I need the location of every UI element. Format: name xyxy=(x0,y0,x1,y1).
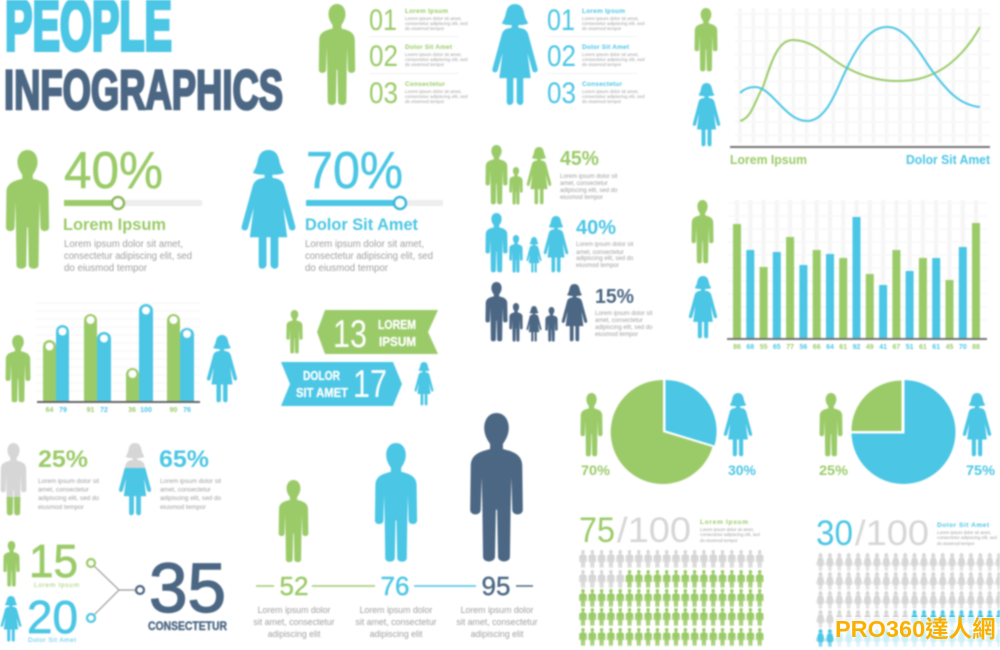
timeline: 95 xyxy=(482,571,510,601)
panel: sum diagram: CONSECTETUR xyxy=(148,619,227,633)
icon: woman xyxy=(1,596,21,642)
captions: Lorem ipsum dolor xyxy=(258,605,330,615)
icon: man filled xyxy=(1,443,26,515)
panel: 40 percent man: consectetur adipiscing elit, sed xyxy=(64,251,192,262)
numbered items: Consectetur xyxy=(582,81,622,88)
numbered items: do eiusmod tempor xyxy=(405,26,445,31)
timeline xyxy=(256,571,533,601)
bar values: 88 xyxy=(972,344,980,351)
bar values: 45 xyxy=(946,344,953,351)
numbered items: do eiusmod tempor xyxy=(405,62,445,67)
panel: pie 25/75 xyxy=(819,380,995,484)
panel: 75 of 100 xyxy=(579,511,764,646)
numbered items: Lorem Ipsum xyxy=(582,8,625,15)
numbered items: do eiusmod tempor xyxy=(582,62,622,67)
panel: pie 70/30: 30% xyxy=(728,463,756,478)
icon: woman xyxy=(207,335,237,402)
panel: pie 25/75: 75% xyxy=(966,463,995,478)
icon: woman xyxy=(689,276,717,338)
panel: family 40 percent: Lorem ipsum dolor sit xyxy=(576,242,634,248)
icon: navy man xyxy=(470,413,523,561)
panel: vertical bar chart xyxy=(689,200,987,351)
panel: numbered list man xyxy=(319,4,468,110)
green ribbon: IPSUM xyxy=(379,335,416,349)
panel: family 45 percent xyxy=(485,145,618,205)
bar values: 61 xyxy=(919,344,927,351)
bar values: 92 xyxy=(853,344,860,351)
panel: sum diagram: 15 xyxy=(29,535,78,587)
panel: sum diagram: Dolor Sit Amet xyxy=(28,637,76,644)
icon: woman xyxy=(724,393,752,456)
bar values: 41 xyxy=(879,344,887,351)
numbered items xyxy=(369,4,468,110)
icon: woman filled xyxy=(119,443,151,515)
bars xyxy=(733,217,980,339)
captions: sit amet, consectetur xyxy=(253,617,335,627)
panel: 25 percent: eiusmod tempor xyxy=(38,504,85,511)
numbered items xyxy=(547,4,645,110)
blue ribbon: SIT AMET xyxy=(296,386,348,400)
panel: family 45 percent: 45% xyxy=(560,148,599,170)
green ribbon xyxy=(317,310,438,356)
blue ribbon xyxy=(281,362,402,406)
panel: family 15 percent: Lorem ipsum dolor sit xyxy=(595,311,653,317)
icon: woman xyxy=(242,150,295,269)
numbered items: Dolor Sit Amet xyxy=(405,44,453,51)
panel: 30 of 100 xyxy=(816,514,1000,647)
numbered items: Lorem ipsum dolor sit amet, xyxy=(405,52,462,57)
green ribbon: LOREM xyxy=(378,318,416,332)
bar values: 72 xyxy=(100,407,108,414)
bar values xyxy=(46,407,191,414)
panel: 75 of 100: /100 xyxy=(617,511,691,550)
panel: family 40 percent: 40% xyxy=(576,217,616,239)
bar values: 65 xyxy=(773,344,781,351)
panel: 70 percent woman: 70% xyxy=(306,142,403,200)
numbered items: consectetur adipiscing elit, sed xyxy=(405,21,468,26)
icon: man xyxy=(286,310,303,354)
bar values: 100 xyxy=(140,407,152,414)
panel: family 15 percent xyxy=(485,282,653,342)
panel: family 45 percent: eiusmod tempor xyxy=(560,195,603,201)
panel: 75 of 100: Lorem Ipsum xyxy=(700,519,748,526)
pictogram grid xyxy=(579,550,764,646)
legend labels xyxy=(730,153,991,167)
panel: family 40 percent xyxy=(485,213,634,273)
numbered items: 03 xyxy=(547,77,576,110)
panel: family 15 percent: adipiscing elit, sed do xyxy=(595,325,653,331)
panel: family 40 percent: adipiscing elit, sed do xyxy=(576,256,634,262)
numbered items: Dolor Sit Amet xyxy=(582,44,630,51)
panel: 40 percent man: do eiusmod tempor xyxy=(64,263,148,274)
legend labels: Lorem Ipsum xyxy=(730,153,807,167)
icon: man xyxy=(319,4,355,105)
numbered items: 02 xyxy=(369,40,398,73)
panel: 30 of 100: /100 xyxy=(855,514,929,553)
icon: man xyxy=(691,200,714,263)
panel: family 45 percent: Lorem ipsum dolor sit xyxy=(560,174,618,180)
panel: 70 percent woman: Lorem ipsum dolor sit amet, xyxy=(305,239,424,250)
bar values: 76 xyxy=(183,407,191,414)
title: INFOGRAPHICS xyxy=(4,58,283,121)
numbered items: Lorem ipsum dolor sit amet, xyxy=(582,16,639,21)
timeline: 76 xyxy=(381,571,409,601)
panel: 70 percent woman xyxy=(242,142,443,274)
panel: 70 percent woman: do eiusmod tempor xyxy=(305,263,389,274)
pie chart xyxy=(611,380,717,484)
numbered items: 01 xyxy=(369,4,397,37)
icon: woman xyxy=(492,4,538,105)
bar values: 79 xyxy=(59,407,67,414)
captions: Lorem ipsum dolor xyxy=(461,605,533,615)
numbered items: consectetur adipiscing elit, sed xyxy=(582,57,645,62)
panel: family 40 percent: eiusmod tempor xyxy=(576,263,619,269)
bar values: 51 xyxy=(906,344,914,351)
panel: rounded bar chart xyxy=(6,303,237,414)
numbered items: Lorem Ipsum xyxy=(405,8,448,15)
numbered items: consectetur adipiscing elit, sed xyxy=(405,57,468,62)
bar values: 68 xyxy=(746,344,754,351)
panel: sum diagram xyxy=(1,535,227,644)
icon: woman xyxy=(415,362,433,406)
bar values: 64 xyxy=(826,344,834,351)
panel: sum diagram: 35 xyxy=(149,549,226,627)
panel: 65 percent: Lorem ipsum dolor sit xyxy=(160,478,221,485)
blue curve xyxy=(740,27,980,121)
panel: 30 of 100: Lorem ipsum dolor sit amet, xyxy=(937,530,991,535)
bar values: 70 xyxy=(959,344,967,351)
bar values: 67 xyxy=(893,344,900,351)
panel: 40 percent man xyxy=(6,142,202,274)
panel: 40 percent man: Lorem Ipsum xyxy=(63,215,166,234)
numbered items: Consectetur xyxy=(405,81,445,88)
pictogram grid xyxy=(816,553,1000,647)
icon: woman xyxy=(963,393,991,456)
panel: 25 percent: amet, consectetur xyxy=(38,486,90,494)
bar knobs xyxy=(46,306,191,378)
bar values xyxy=(733,344,980,351)
blue ribbon: DOLOR xyxy=(303,369,340,383)
panel: 65 percent: eiusmod tempor xyxy=(160,504,207,511)
captions xyxy=(253,605,538,639)
panel: 30 of 100: Dolor Sit Amet xyxy=(937,522,990,529)
captions: sit amet, consectetur xyxy=(456,617,538,627)
captions: sit amet, consectetur xyxy=(355,617,437,627)
panel: ribbons xyxy=(281,310,438,406)
numbered items: Lorem ipsum dolor sit amet, xyxy=(405,89,462,94)
icon: man xyxy=(3,541,20,587)
panel: pie 25/75: 25% xyxy=(819,463,848,478)
bar values: 86 xyxy=(733,344,741,351)
numbered items: consectetur adipiscing elit, sed xyxy=(405,94,468,99)
bar values: 55 xyxy=(760,344,768,351)
numbered items: do eiusmod tempor xyxy=(582,26,622,31)
numbered items: do eiusmod tempor xyxy=(405,99,445,104)
icon: green man xyxy=(279,480,308,562)
captions: adipiscing elit xyxy=(370,629,423,639)
bar values: 77 xyxy=(786,344,794,351)
panel: pie 70/30 xyxy=(580,380,756,484)
captions: adipiscing elit xyxy=(471,629,524,639)
title xyxy=(4,0,283,121)
bar values: 61 xyxy=(839,344,847,351)
icon: blue man xyxy=(375,443,417,562)
numbered items: Lorem ipsum dolor sit amet, xyxy=(582,52,639,57)
panel: family 40 percent: amet, consectetur xyxy=(576,250,624,256)
bar values: 36 xyxy=(128,407,136,414)
panel: 25 percent: adipiscing elit, sed do xyxy=(38,495,100,502)
panel: family 15 percent: amet, consectetur xyxy=(595,318,643,324)
panel: 65 percent: amet, consectetur xyxy=(160,486,212,494)
panel: 30 of 100: 30 xyxy=(816,514,853,553)
icon: man xyxy=(695,8,717,71)
panel: pie 70/30: 70% xyxy=(581,463,610,478)
panel: 70 percent woman: consectetur adipiscing elit, sed xyxy=(305,251,433,262)
bar values: 91 xyxy=(87,407,94,414)
panel: 25 percent xyxy=(1,443,100,515)
legend labels: Dolor Sit Amet xyxy=(906,153,991,167)
slider xyxy=(64,197,202,209)
panel: 30 of 100: do eiusmod tempor xyxy=(937,541,975,546)
panel: 65 percent: 65% xyxy=(159,446,209,473)
panel: 25 percent: Lorem ipsum dolor sit xyxy=(38,478,99,485)
panel: 75 of 100: 75 xyxy=(579,511,615,550)
numbered items: 03 xyxy=(369,77,398,110)
captions: adipiscing elit xyxy=(268,629,321,639)
panel: 40 percent man: Lorem ipsum dolor sit amet, xyxy=(64,239,183,250)
panel: 65 percent: adipiscing elit, sed do xyxy=(160,495,222,502)
icon: man xyxy=(580,393,603,456)
numbered items: do eiusmod tempor xyxy=(582,99,622,104)
numbered items: consectetur adipiscing elit, sed xyxy=(582,94,645,99)
numbered items: consectetur adipiscing elit, sed xyxy=(582,21,645,26)
panel: numbered list woman xyxy=(492,4,645,110)
bars xyxy=(43,304,194,402)
panel: sum diagram: 20 xyxy=(27,591,78,643)
panel: height comparison xyxy=(253,413,538,639)
connector xyxy=(87,559,144,622)
panel: 30 of 100: consectetur adipiscing elit, sed xyxy=(937,535,997,540)
panel: family 15 percent: 15% xyxy=(595,286,634,308)
bar values: 64 xyxy=(46,407,53,414)
slider xyxy=(306,197,443,209)
panel: family 45 percent: adipiscing elit, sed do xyxy=(560,188,618,194)
captions: Lorem ipsum dolor xyxy=(360,605,432,615)
panel: 75 of 100: Lorem ipsum dolor sit amet, xyxy=(700,527,754,532)
pie chart xyxy=(851,380,955,484)
panel: 70 percent woman: Dolor Sit Amet xyxy=(305,215,418,234)
numbered items: 01 xyxy=(547,4,575,37)
numbered items: Lorem ipsum dolor sit amet, xyxy=(405,16,462,21)
bar values: 90 xyxy=(170,407,177,414)
watermark: PRO360達人網 xyxy=(835,616,996,642)
panel: 65 percent xyxy=(119,443,222,515)
panel: 75 of 100: consectetur adipiscing elit, sed xyxy=(700,532,760,537)
blue ribbon: 17 xyxy=(353,363,387,406)
panel: line chart xyxy=(693,8,991,167)
panel: 75 of 100: do eiusmod tempor xyxy=(700,538,738,543)
timeline: 52 xyxy=(280,571,308,601)
numbered items: Lorem ipsum dolor sit amet, xyxy=(582,89,639,94)
icon: woman xyxy=(693,83,720,146)
green ribbon: 13 xyxy=(333,313,367,356)
bar values: 66 xyxy=(813,344,821,351)
icon: man xyxy=(6,335,30,402)
bar values: 61 xyxy=(932,344,940,351)
panel: 40 percent man: 40% xyxy=(64,142,163,200)
bar values: 49 xyxy=(866,344,874,351)
panel: 25 percent: 25% xyxy=(38,446,88,473)
panel: family 15 percent: eiusmod tempor xyxy=(595,332,638,338)
panel: family 45 percent: amet, consectetur xyxy=(560,181,608,187)
bar values: 56 xyxy=(800,344,807,351)
icon: man xyxy=(820,393,842,456)
icon: man xyxy=(6,150,49,269)
panel: sum diagram: Lorem Ipsum xyxy=(34,582,79,589)
numbered items: 02 xyxy=(547,40,576,73)
green curve xyxy=(740,27,980,121)
